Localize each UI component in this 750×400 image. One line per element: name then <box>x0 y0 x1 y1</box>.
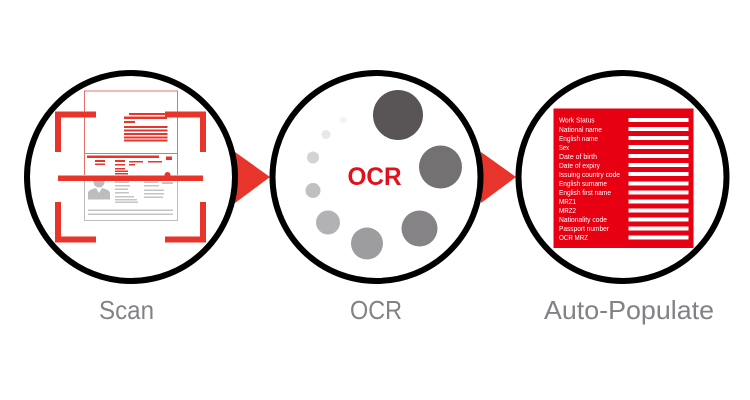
form field labels: MRZ2 <box>559 206 576 215</box>
loading spinner dots <box>306 90 462 260</box>
form field labels: National name <box>559 125 602 134</box>
circle outline: scan <box>27 73 235 281</box>
form field labels: OCR MRZ <box>559 233 588 242</box>
form field labels: Date of birth <box>559 152 597 161</box>
circle outline: OCR <box>272 73 480 281</box>
arrow: OCR to auto-populate <box>481 152 516 203</box>
form field labels: Work Status <box>559 116 595 124</box>
circle outline: auto-populate <box>518 73 726 281</box>
form field labels: Passport number <box>559 224 610 233</box>
red form <box>554 108 694 248</box>
form field labels: Sex <box>559 143 569 152</box>
caption: Auto-Populate: Auto-Populate <box>544 295 714 325</box>
form field labels: Nationality code <box>559 215 607 224</box>
form field labels: English surname <box>559 179 607 188</box>
arrow: scan to OCR <box>235 152 270 203</box>
document outline <box>84 91 178 220</box>
document red text bars <box>87 113 172 178</box>
form field labels <box>559 116 620 242</box>
form field labels: Date of expiry <box>559 161 600 170</box>
panel: auto-populate <box>518 73 726 281</box>
caption: Scan: Scan <box>99 295 154 325</box>
panel: scan <box>27 73 235 281</box>
form field labels: English first name <box>559 188 611 197</box>
icon: passport person <box>88 176 110 200</box>
OCR label: OCR <box>348 163 402 191</box>
panel: OCR <box>272 73 480 281</box>
scan line <box>58 176 203 181</box>
caption: OCR: OCR <box>350 295 402 325</box>
scanner corner brackets <box>58 114 203 240</box>
form field labels: Issuing country code <box>559 170 620 179</box>
form field labels: MRZ1 <box>559 197 576 206</box>
document grey text bars <box>88 182 173 215</box>
form field input bars <box>628 118 688 240</box>
form field labels: English name <box>559 134 598 143</box>
